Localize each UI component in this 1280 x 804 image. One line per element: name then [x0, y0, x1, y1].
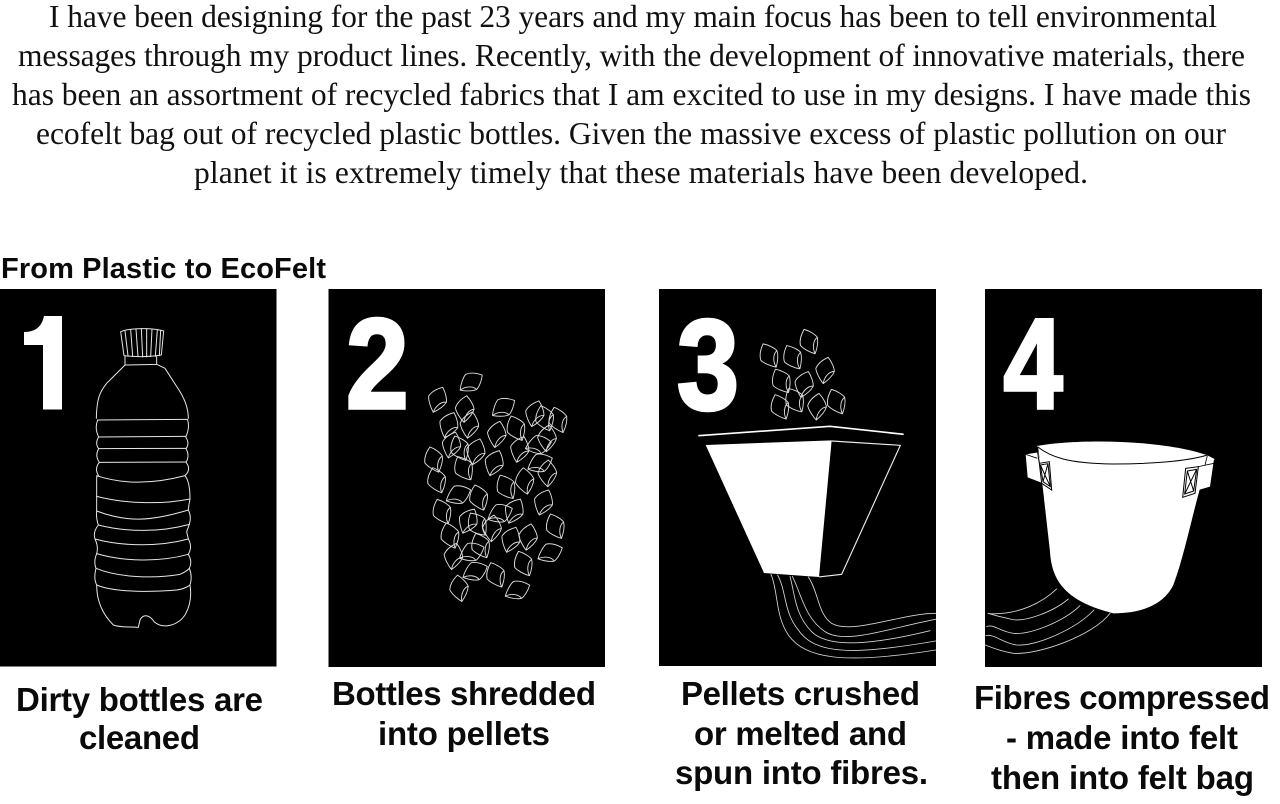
intro paragraph: I have been designing for the past 23 years and my main focus has been to tell environmental: [49, 0, 1217, 34]
caption: step 1: Dirty bottles are: [16, 681, 263, 718]
caption: step 4: - made into felt: [1006, 719, 1238, 756]
caption: step 3: [675, 675, 928, 791]
heading: From Plastic to EcoFelt: [1, 253, 326, 285]
number 3: 3: [677, 294, 739, 437]
icon: plastic bottle: [94, 329, 191, 627]
intro paragraph: [12, 0, 1251, 190]
caption: step 1: [16, 681, 263, 756]
caption: step 2: into pellets: [378, 715, 550, 752]
caption: step 2: Bottles shredded: [332, 675, 596, 712]
number 4: 4: [1004, 293, 1063, 435]
caption: step 4: then into felt bag: [991, 759, 1254, 796]
caption: step 4: [974, 679, 1270, 796]
caption: step 3: or melted and: [694, 715, 907, 752]
panel: step 4: [985, 289, 1262, 667]
caption: step 2: [332, 675, 596, 752]
intro paragraph: ecofelt bag out of recycled plastic bottles. Given the massive excess of plastic pollution on our: [36, 116, 1226, 151]
number 1: 1: [23, 293, 80, 437]
number 2: 2: [346, 292, 409, 436]
intro paragraph: messages through my product lines. Recently, with the development of innovative materials, there: [18, 38, 1245, 73]
caption: step 3: Pellets crushed: [681, 675, 920, 712]
panel: step 2: [328, 289, 605, 667]
icon: felt bag with fibres: [985, 442, 1215, 653]
icon: shredded pellets: [421, 367, 570, 603]
icon: pellets falling into funnel: [698, 326, 936, 658]
caption: step 1: cleaned: [79, 719, 200, 756]
panel: step 3: [659, 289, 936, 666]
intro paragraph: has been an assortment of recycled fabrics that I am excited to use in my designs. I have made this: [12, 77, 1251, 112]
caption: step 4: Fibres compressed: [974, 679, 1270, 716]
panel: step 1: [0, 289, 276, 666]
caption: step 3: spun into fibres.: [675, 754, 928, 791]
intro paragraph: planet it is extremely timely that these materials have been developed.: [194, 155, 1088, 190]
